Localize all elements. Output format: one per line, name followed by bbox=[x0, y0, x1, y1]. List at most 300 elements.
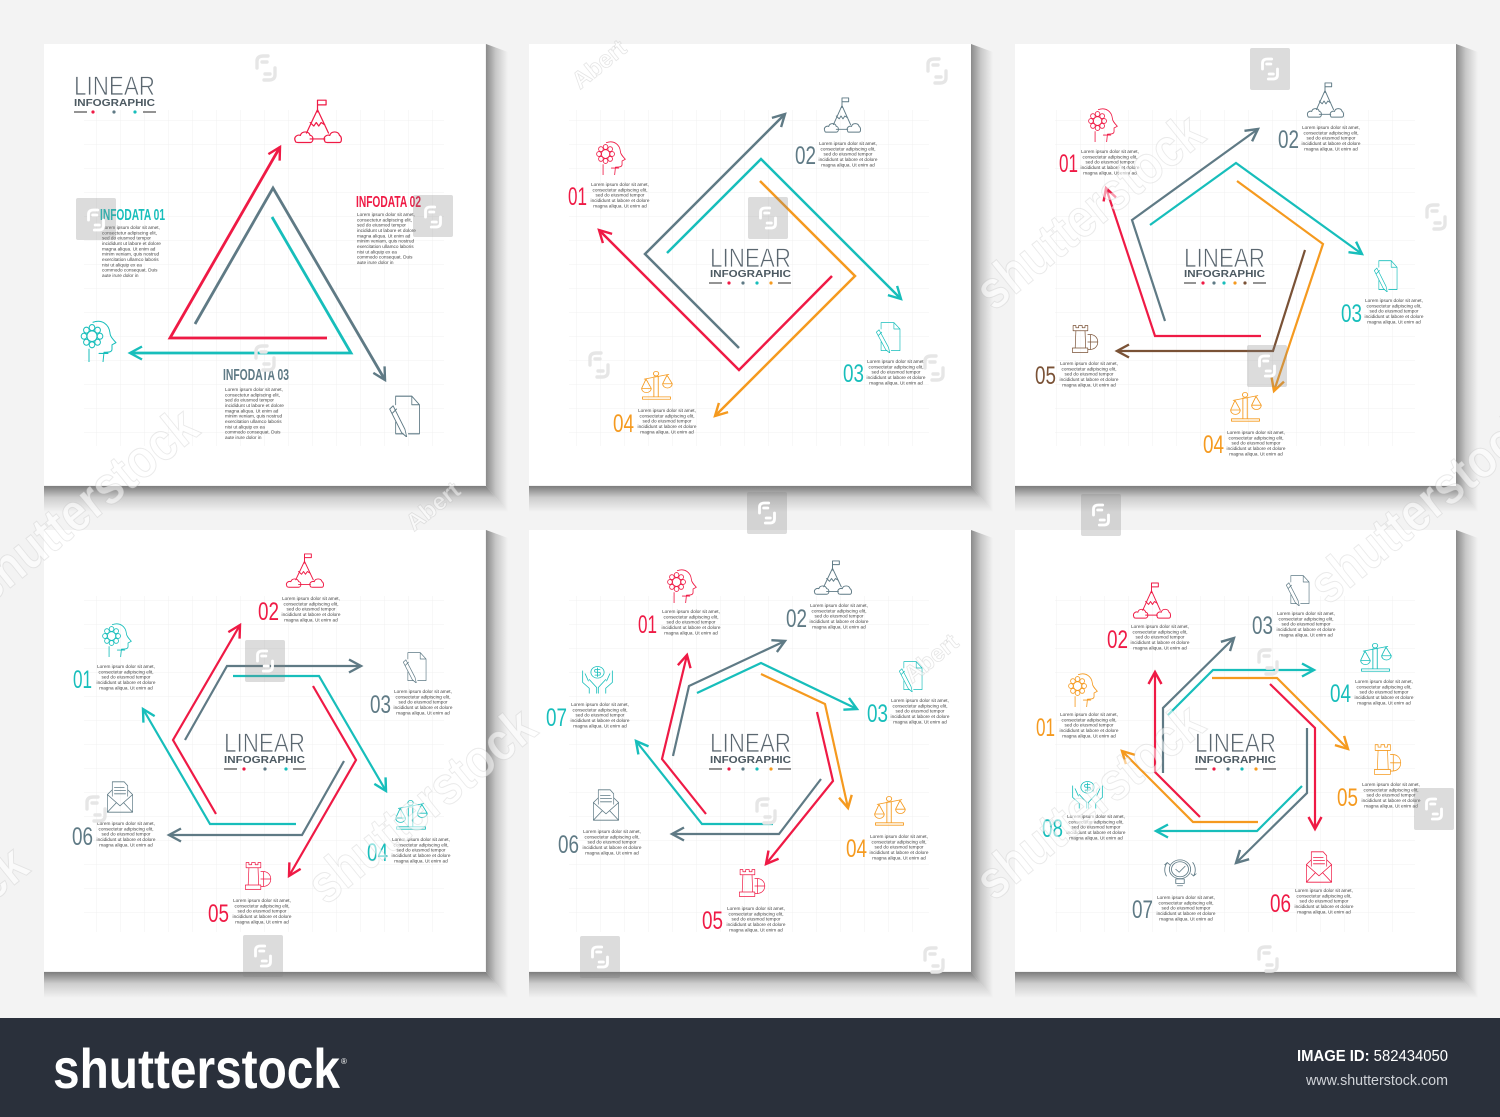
text block: incididunt ut labore et dolore bbox=[1295, 904, 1354, 909]
logo: linear infographic bbox=[709, 728, 791, 771]
text block: magna aliqua. Ut enim ad bbox=[1062, 733, 1116, 738]
text block: magna aliqua. Ut enim ad bbox=[284, 617, 338, 622]
block: infodata 01: INFODATA 01 bbox=[100, 207, 165, 224]
text block: magna aliqua. Ut enim ad bbox=[1279, 632, 1333, 637]
text block: sed do eiusmod tempor bbox=[102, 675, 151, 680]
block: infodata 01: nisi ut aliquip ex ea bbox=[102, 262, 142, 267]
square arrow: orange bbox=[715, 181, 855, 416]
text block: consectetur adipiscing elit, bbox=[1083, 154, 1137, 159]
step 05 bbox=[1337, 745, 1421, 812]
watermark overlay: Abert bbox=[401, 477, 466, 537]
block: infodata 02: minim veniam, quis nostrud bbox=[357, 239, 414, 244]
text block: sed do eiusmod tempor bbox=[286, 607, 336, 612]
block: infodata 02: magna aliqua. Ut enim ad bbox=[357, 233, 411, 238]
text block: incididunt ut labore et dolore bbox=[1365, 314, 1424, 319]
text block: consectetur adipiscing elit, bbox=[664, 614, 718, 619]
text block: sed do eiusmod tempor bbox=[398, 700, 448, 705]
block: infodata 01: consectetur adipiscing elit, bbox=[102, 230, 157, 235]
triangle arrow: red bbox=[170, 147, 327, 338]
text block: sed do eiusmod tempor bbox=[1360, 690, 1409, 695]
text block: magna aliqua. Ut enim ad bbox=[1367, 319, 1421, 324]
footer bar bbox=[0, 1018, 1500, 1117]
logo: linear infographic: LINEAR bbox=[1184, 243, 1265, 273]
text block: magna aliqua. Ut enim ad bbox=[872, 855, 926, 860]
block: infodata 01: incididunt ut labore et dolore bbox=[102, 241, 161, 246]
text block: consectetur adipiscing elit, bbox=[640, 413, 694, 418]
step 06 bbox=[72, 782, 156, 851]
icon: head with gear bbox=[1069, 674, 1097, 707]
text block: Lorem ipsum dolor sit amet, bbox=[97, 664, 155, 669]
text block: sed do eiusmod tempor bbox=[642, 419, 692, 424]
octagon arrow: teal 1 bbox=[1168, 670, 1314, 715]
text block: sed do eiusmod tempor bbox=[1086, 160, 1135, 165]
step 07 bbox=[546, 666, 630, 732]
text block: magna aliqua. Ut enim ad bbox=[1229, 451, 1283, 456]
logo: linear infographic: LINEAR bbox=[224, 728, 305, 758]
number 04: 04 bbox=[846, 835, 867, 863]
step 03 bbox=[867, 662, 950, 728]
text block: Lorem ipsum dolor sit amet, bbox=[394, 689, 452, 694]
heptagon arrow: teal 2 bbox=[636, 741, 773, 824]
icon: document and pen bbox=[1374, 261, 1397, 292]
text block: sed do eiusmod tempor bbox=[896, 709, 945, 714]
text block: incididunt ut labore et dolore bbox=[1355, 695, 1414, 700]
block: infodata 02: sed do eiusmod tempor bbox=[357, 223, 406, 228]
icon: head with gear bbox=[597, 142, 625, 175]
text block: incididunt ut labore et dolore bbox=[394, 705, 453, 710]
icon: head with gear bbox=[81, 321, 116, 362]
text block: incididunt ut labore et dolore bbox=[891, 714, 950, 719]
hexagon arrow: gray 1 bbox=[185, 666, 361, 740]
icon: head with gear bbox=[1089, 109, 1117, 142]
hexagon arrow: teal 2 bbox=[143, 709, 296, 824]
pentagon arrow: orange bbox=[1237, 181, 1323, 391]
text block: magna aliqua. Ut enim ad bbox=[585, 850, 639, 855]
text block: incididunt ut labore et dolore bbox=[1157, 911, 1216, 916]
text block: incididunt ut labore et dolore bbox=[867, 375, 926, 380]
triangle arrow: teal bbox=[130, 217, 351, 353]
number 01: 01 bbox=[73, 666, 92, 694]
number 03: 03 bbox=[1252, 612, 1273, 640]
watermark overlay: Abert bbox=[899, 629, 964, 689]
logo: linear infographic: INFOGRAPHIC bbox=[710, 754, 791, 766]
number 02: 02 bbox=[786, 605, 807, 633]
text block: Lorem ipsum dolor sit amet, bbox=[1355, 679, 1413, 684]
logo: linear infographic: INFOGRAPHIC bbox=[74, 97, 155, 109]
text block: Lorem ipsum dolor sit amet, bbox=[1227, 430, 1285, 435]
icon: document and pen bbox=[876, 323, 900, 353]
panel: pentagon, five steps bbox=[1015, 44, 1478, 512]
text block: Lorem ipsum dolor sit amet, bbox=[1277, 611, 1335, 616]
pentagon arrow: brown bbox=[1117, 250, 1305, 351]
text block: sed do eiusmod tempor bbox=[1282, 622, 1331, 627]
text block: consectetur adipiscing elit, bbox=[821, 146, 875, 151]
text block: incididunt ut labore et dolore bbox=[1302, 141, 1361, 146]
text block: magna aliqua. Ut enim ad bbox=[1297, 909, 1351, 914]
text block: consectetur adipiscing elit, bbox=[1159, 900, 1213, 905]
block: infodata 01 bbox=[100, 207, 165, 278]
text block: consectetur adipiscing elit, bbox=[284, 601, 338, 606]
panel: square, four steps bbox=[529, 44, 993, 512]
icon: hands holding coin bbox=[583, 666, 612, 693]
step 01 bbox=[1036, 674, 1119, 742]
number 05: 05 bbox=[1337, 784, 1358, 812]
text block: consectetur adipiscing elit, bbox=[1069, 819, 1123, 824]
text block: magna aliqua. Ut enim ad bbox=[1062, 382, 1116, 387]
heptagon arrow: gray 2 bbox=[672, 779, 821, 834]
text block: incididunt ut labore et dolore bbox=[1060, 377, 1119, 382]
logo: linear infographic bbox=[224, 728, 306, 771]
text block: sed do eiusmod tempor bbox=[814, 614, 864, 619]
text block: magna aliqua. Ut enim ad bbox=[640, 429, 694, 434]
text block: magna aliqua. Ut enim ad bbox=[99, 685, 153, 690]
text block: Lorem ipsum dolor sit amet, bbox=[1362, 782, 1420, 787]
text block: incididunt ut labore et dolore bbox=[662, 625, 721, 630]
text block: consectetur adipiscing elit, bbox=[1357, 684, 1411, 689]
text block: magna aliqua. Ut enim ad bbox=[394, 858, 448, 863]
icon: mountain with flag bbox=[814, 561, 852, 594]
step 05 bbox=[208, 862, 292, 928]
step 03 bbox=[843, 323, 926, 388]
number 04: 04 bbox=[1203, 431, 1224, 459]
registered mark: ® bbox=[341, 1057, 347, 1066]
number 03: 03 bbox=[843, 360, 864, 388]
number 04: 04 bbox=[613, 410, 634, 438]
text block: incididunt ut labore et dolore bbox=[810, 619, 869, 624]
text block: Lorem ipsum dolor sit amet, bbox=[583, 829, 641, 834]
block: infodata 01: magna aliqua. Ut enim ad bbox=[102, 246, 156, 251]
icon: balance scale bbox=[875, 796, 905, 825]
icon: light bulb with check bbox=[1165, 860, 1196, 886]
icon: mountain with flag bbox=[824, 98, 861, 132]
block: infodata 01: Lorem ipsum dolor sit amet, bbox=[102, 225, 160, 230]
text block: sed do eiusmod tempor bbox=[596, 193, 645, 198]
logo: linear infographic: INFOGRAPHIC bbox=[1184, 268, 1265, 280]
text block: consectetur adipiscing elit, bbox=[1062, 717, 1116, 722]
text block: incididunt ut labore et dolore bbox=[392, 853, 451, 858]
step 01 bbox=[568, 142, 650, 211]
text block: Lorem ipsum dolor sit amet, bbox=[1157, 895, 1215, 900]
block: infodata 03: Lorem ipsum dolor sit amet, bbox=[225, 387, 283, 392]
text block: magna aliqua. Ut enim ad bbox=[235, 919, 289, 924]
number 07: 07 bbox=[1132, 896, 1153, 924]
block: infodata 02: consectetur adipiscing elit, bbox=[357, 217, 412, 222]
number 03: 03 bbox=[1341, 300, 1362, 328]
text block: magna aliqua. Ut enim ad bbox=[812, 624, 866, 629]
image id: IMAGE ID: 582434050 bbox=[1297, 1048, 1448, 1065]
number 03: 03 bbox=[867, 700, 888, 728]
pentagon arrow: gray bbox=[1132, 129, 1258, 321]
heptagon arrow: red 2 bbox=[766, 712, 833, 864]
block: infodata 02: incididunt ut labore et dolore bbox=[357, 228, 416, 233]
number 01: 01 bbox=[1036, 714, 1055, 742]
block: infodata 03: sed do eiusmod tempor bbox=[225, 398, 274, 403]
text block: sed do eiusmod tempor bbox=[1370, 309, 1419, 314]
text block: sed do eiusmod tempor bbox=[1366, 793, 1416, 798]
text block: sed do eiusmod tempor bbox=[1300, 899, 1349, 904]
logo: linear infographic: LINEAR bbox=[710, 728, 791, 758]
text block: consectetur adipiscing elit, bbox=[394, 842, 448, 847]
block: infodata 02: exercitation ullamco laboris bbox=[357, 244, 414, 249]
number 07: 07 bbox=[546, 704, 567, 732]
logo: linear infographic: LINEAR bbox=[710, 243, 791, 273]
icon: document and pen bbox=[390, 396, 419, 437]
text block: Lorem ipsum dolor sit amet, bbox=[1302, 125, 1360, 130]
number 01: 01 bbox=[638, 611, 657, 639]
text block: sed do eiusmod tempor bbox=[872, 370, 921, 375]
panel: triangle, three steps bbox=[44, 44, 508, 512]
icon: tower and shield bbox=[1072, 326, 1098, 352]
step 07 bbox=[1132, 860, 1216, 924]
text block: incididunt ut labore et dolore bbox=[870, 850, 929, 855]
block: infodata 01: minim veniam, quis nostrud bbox=[102, 252, 159, 257]
text block: magna aliqua. Ut enim ad bbox=[1364, 803, 1418, 808]
icon: mountain with flag bbox=[1307, 83, 1344, 117]
text block: Lorem ipsum dolor sit amet, bbox=[662, 609, 720, 614]
block: infodata 03: nisi ut aliquip ex ea bbox=[225, 424, 265, 429]
text block: consectetur adipiscing elit, bbox=[585, 834, 639, 839]
block: infodata 01: sed do eiusmod tempor bbox=[102, 236, 151, 241]
step 05 bbox=[702, 870, 786, 935]
text block: consectetur adipiscing elit, bbox=[235, 903, 289, 908]
text block: incididunt ut labore et dolore bbox=[1227, 446, 1286, 451]
octagon arrow: gray 2 bbox=[1236, 728, 1307, 863]
text block: Lorem ipsum dolor sit amet, bbox=[233, 898, 291, 903]
text block: incididunt ut labore et dolore bbox=[1067, 830, 1126, 835]
logo: linear infographic: INFOGRAPHIC bbox=[710, 268, 791, 280]
number 04: 04 bbox=[1330, 680, 1351, 708]
text block: consectetur adipiscing elit, bbox=[812, 608, 866, 613]
text block: sed do eiusmod tempor bbox=[824, 152, 873, 157]
block: infodata 01: exercitation ullamco laboris bbox=[102, 257, 159, 262]
step 06 bbox=[1270, 852, 1354, 918]
text block: consectetur adipiscing elit, bbox=[396, 694, 450, 699]
text block: consectetur adipiscing elit, bbox=[893, 703, 947, 708]
step 01 bbox=[73, 624, 156, 694]
text block: Lorem ipsum dolor sit amet, bbox=[1365, 298, 1423, 303]
text block: consectetur adipiscing elit, bbox=[872, 839, 926, 844]
text block: incididunt ut labore et dolore bbox=[97, 680, 156, 685]
text block: incididunt ut labore et dolore bbox=[1362, 798, 1421, 803]
text block: sed do eiusmod tempor bbox=[576, 713, 625, 718]
step 02 bbox=[1107, 583, 1190, 654]
icon: envelope bbox=[107, 782, 133, 812]
step 01 bbox=[1059, 109, 1140, 178]
hexagon arrow: red 2 bbox=[289, 686, 356, 876]
text block: incididunt ut labore et dolore bbox=[1081, 165, 1140, 170]
step 05 bbox=[1035, 326, 1119, 390]
text block: magna aliqua. Ut enim ad bbox=[593, 203, 647, 208]
icon: mountain with flag bbox=[295, 100, 341, 142]
number 01: 01 bbox=[568, 183, 587, 211]
step 01 bbox=[638, 570, 721, 639]
text block: consectetur adipiscing elit, bbox=[99, 826, 153, 831]
text block: sed do eiusmod tempor bbox=[396, 848, 446, 853]
text block: Lorem ipsum dolor sit amet, bbox=[638, 408, 696, 413]
block: infodata 03 bbox=[223, 367, 289, 440]
icon: head with gear bbox=[668, 570, 696, 603]
block: infodata 02: commodo consequat. Duis bbox=[357, 255, 413, 260]
heptagon arrow: orange bbox=[761, 674, 848, 808]
text block: incididunt ut labore et dolore bbox=[233, 914, 292, 919]
text block: magna aliqua. Ut enim ad bbox=[1159, 916, 1213, 921]
text block: sed do eiusmod tempor bbox=[1162, 906, 1211, 911]
pentagon arrow: teal bbox=[1150, 163, 1362, 254]
text block: incididunt ut labore et dolore bbox=[282, 612, 341, 617]
hexagon arrow: red 1 bbox=[173, 625, 240, 814]
text block: incididunt ut labore et dolore bbox=[1060, 728, 1119, 733]
text block: incididunt ut labore et dolore bbox=[1277, 627, 1336, 632]
step 04 bbox=[1330, 643, 1414, 708]
text block: sed do eiusmod tempor bbox=[732, 917, 781, 922]
text block: sed do eiusmod tempor bbox=[1232, 441, 1281, 446]
icon: document and pen bbox=[403, 653, 426, 683]
watermark overlay: Abert bbox=[567, 35, 632, 95]
block: infodata 03: INFODATA 03 bbox=[223, 367, 289, 384]
text block: incididunt ut labore et dolore bbox=[571, 718, 630, 723]
text block: Lorem ipsum dolor sit amet, bbox=[870, 834, 928, 839]
block: infodata 03: minim veniam, quis nostrud bbox=[225, 414, 282, 419]
text block: incididunt ut labore et dolore bbox=[591, 198, 650, 203]
panel: octagon, eight steps bbox=[1015, 530, 1478, 998]
number 05: 05 bbox=[1035, 362, 1056, 390]
text block: magna aliqua. Ut enim ad bbox=[1357, 700, 1411, 705]
text block: magna aliqua. Ut enim ad bbox=[1133, 645, 1187, 650]
step 08 bbox=[1042, 781, 1126, 843]
text block: consectetur adipiscing elit, bbox=[1133, 629, 1187, 634]
number 02: 02 bbox=[795, 142, 816, 170]
watermark overlay: shutterstock bbox=[964, 691, 1216, 911]
icon: balance scale bbox=[1361, 643, 1391, 671]
text block: Lorem ipsum dolor sit amet, bbox=[392, 837, 450, 842]
text block: incididunt ut labore et dolore bbox=[638, 424, 697, 429]
logo: linear infographic: INFOGRAPHIC bbox=[224, 754, 305, 766]
text block: magna aliqua. Ut enim ad bbox=[729, 927, 783, 932]
step 03 bbox=[1341, 261, 1424, 328]
octagon arrow: gray 1 bbox=[1163, 638, 1234, 773]
panel: heptagon, seven steps bbox=[529, 530, 993, 998]
octagon arrow: orange 1 bbox=[1212, 678, 1348, 749]
text block: incididunt ut labore et dolore bbox=[1131, 640, 1190, 645]
logo: linear infographic bbox=[1184, 243, 1266, 285]
text block: sed do eiusmod tempor bbox=[666, 620, 716, 625]
text block: consectetur adipiscing elit, bbox=[1229, 435, 1283, 440]
text block: magna aliqua. Ut enim ad bbox=[1069, 835, 1123, 840]
icon: balance scale bbox=[1231, 392, 1261, 421]
text block: consectetur adipiscing elit, bbox=[593, 187, 647, 192]
heptagon arrow: teal 1 bbox=[697, 663, 857, 709]
step 02 bbox=[795, 98, 878, 170]
icon: head with gear bbox=[103, 624, 131, 657]
text block: sed do eiusmod tempor bbox=[102, 832, 151, 837]
number 06: 06 bbox=[72, 823, 93, 851]
hexagon arrow: teal 1 bbox=[233, 676, 386, 791]
step 03 bbox=[1252, 576, 1336, 640]
text block: consectetur adipiscing elit, bbox=[729, 911, 783, 916]
block: infodata 02: INFODATA 02 bbox=[356, 194, 421, 211]
block: infodata 02: aute irure dolor in bbox=[357, 260, 394, 265]
text block: sed do eiusmod tempor bbox=[1064, 723, 1114, 728]
logo: linear infographic: INFOGRAPHIC bbox=[1195, 754, 1276, 766]
text block: consectetur adipiscing elit, bbox=[869, 364, 923, 369]
block: infodata 03: commodo consequat. Duis bbox=[225, 430, 281, 435]
octagon arrow: orange 2 bbox=[1122, 751, 1258, 822]
text block: Lorem ipsum dolor sit amet, bbox=[571, 702, 629, 707]
text block: incididunt ut labore et dolore bbox=[97, 837, 156, 842]
text block: Lorem ipsum dolor sit amet, bbox=[819, 141, 877, 146]
step 02 bbox=[1278, 83, 1361, 154]
watermark overlay: shutterstock bbox=[964, 101, 1216, 321]
text block: magna aliqua. Ut enim ad bbox=[1304, 146, 1358, 151]
icon: envelope bbox=[593, 790, 619, 820]
text block: magna aliqua. Ut enim ad bbox=[893, 719, 947, 724]
step 04 bbox=[846, 796, 929, 863]
text block: consectetur adipiscing elit, bbox=[1367, 303, 1421, 308]
number 05: 05 bbox=[208, 900, 229, 928]
number 05: 05 bbox=[702, 907, 723, 935]
triangle arrow: gray bbox=[195, 188, 385, 380]
square arrow: red bbox=[599, 230, 832, 370]
step 06 bbox=[558, 790, 642, 859]
text block: Lorem ipsum dolor sit amet, bbox=[1060, 712, 1118, 717]
text block: incididunt ut labore et dolore bbox=[583, 845, 642, 850]
icon: envelope bbox=[1306, 852, 1332, 882]
text block: consectetur adipiscing elit, bbox=[1364, 787, 1418, 792]
icon: mountain with flag bbox=[286, 554, 324, 587]
panel: hexagon, six steps bbox=[44, 530, 508, 998]
number 06: 06 bbox=[558, 831, 579, 859]
number 02: 02 bbox=[258, 598, 279, 626]
text block: magna aliqua. Ut enim ad bbox=[869, 380, 923, 385]
block: infodata 03: incididunt ut labore et dolore bbox=[225, 403, 284, 408]
text block: sed do eiusmod tempor bbox=[588, 840, 637, 845]
octagon arrow: red 2 bbox=[1270, 684, 1315, 829]
text block: sed do eiusmod tempor bbox=[1306, 136, 1356, 141]
block: infodata 03: consectetur adipiscing elit, bbox=[225, 392, 280, 397]
text block: incididunt ut labore et dolore bbox=[727, 922, 786, 927]
text block: incididunt ut labore et dolore bbox=[819, 157, 878, 162]
step 04 bbox=[613, 371, 697, 438]
text block: magna aliqua. Ut enim ad bbox=[1083, 170, 1137, 175]
text block: Lorem ipsum dolor sit amet, bbox=[727, 906, 785, 911]
icon: tower and shield bbox=[1374, 745, 1401, 774]
text block: Lorem ipsum dolor sit amet, bbox=[810, 603, 868, 608]
watermark overlay: shutterstock bbox=[296, 695, 548, 915]
text block: consectetur adipiscing elit, bbox=[1279, 616, 1333, 621]
text block: Lorem ipsum dolor sit amet, bbox=[97, 821, 155, 826]
icon: balance scale bbox=[396, 800, 427, 829]
step 04 bbox=[1203, 392, 1286, 459]
logo: linear infographic bbox=[74, 71, 156, 114]
block: infodata 02: nisi ut aliquip ex ea bbox=[357, 249, 397, 254]
number 02: 02 bbox=[1278, 126, 1299, 154]
number 08: 08 bbox=[1042, 815, 1063, 843]
text block: Lorem ipsum dolor sit amet, bbox=[282, 596, 340, 601]
text block: sed do eiusmod tempor bbox=[238, 909, 287, 914]
hexagon arrow: gray 2 bbox=[169, 761, 344, 835]
number 03: 03 bbox=[370, 691, 391, 719]
block: infodata 01: commodo consequat. Duis bbox=[102, 268, 158, 273]
text block: sed do eiusmod tempor bbox=[1064, 372, 1114, 377]
text block: magna aliqua. Ut enim ad bbox=[573, 723, 627, 728]
text block: magna aliqua. Ut enim ad bbox=[664, 630, 718, 635]
step 04 bbox=[367, 800, 451, 867]
text block: sed do eiusmod tempor bbox=[1072, 825, 1121, 830]
text block: consectetur adipiscing elit, bbox=[573, 707, 627, 712]
square arrow: gray bbox=[645, 114, 785, 348]
text block: Lorem ipsum dolor sit amet, bbox=[1067, 814, 1125, 819]
icon: mountain with flag bbox=[1133, 583, 1171, 618]
